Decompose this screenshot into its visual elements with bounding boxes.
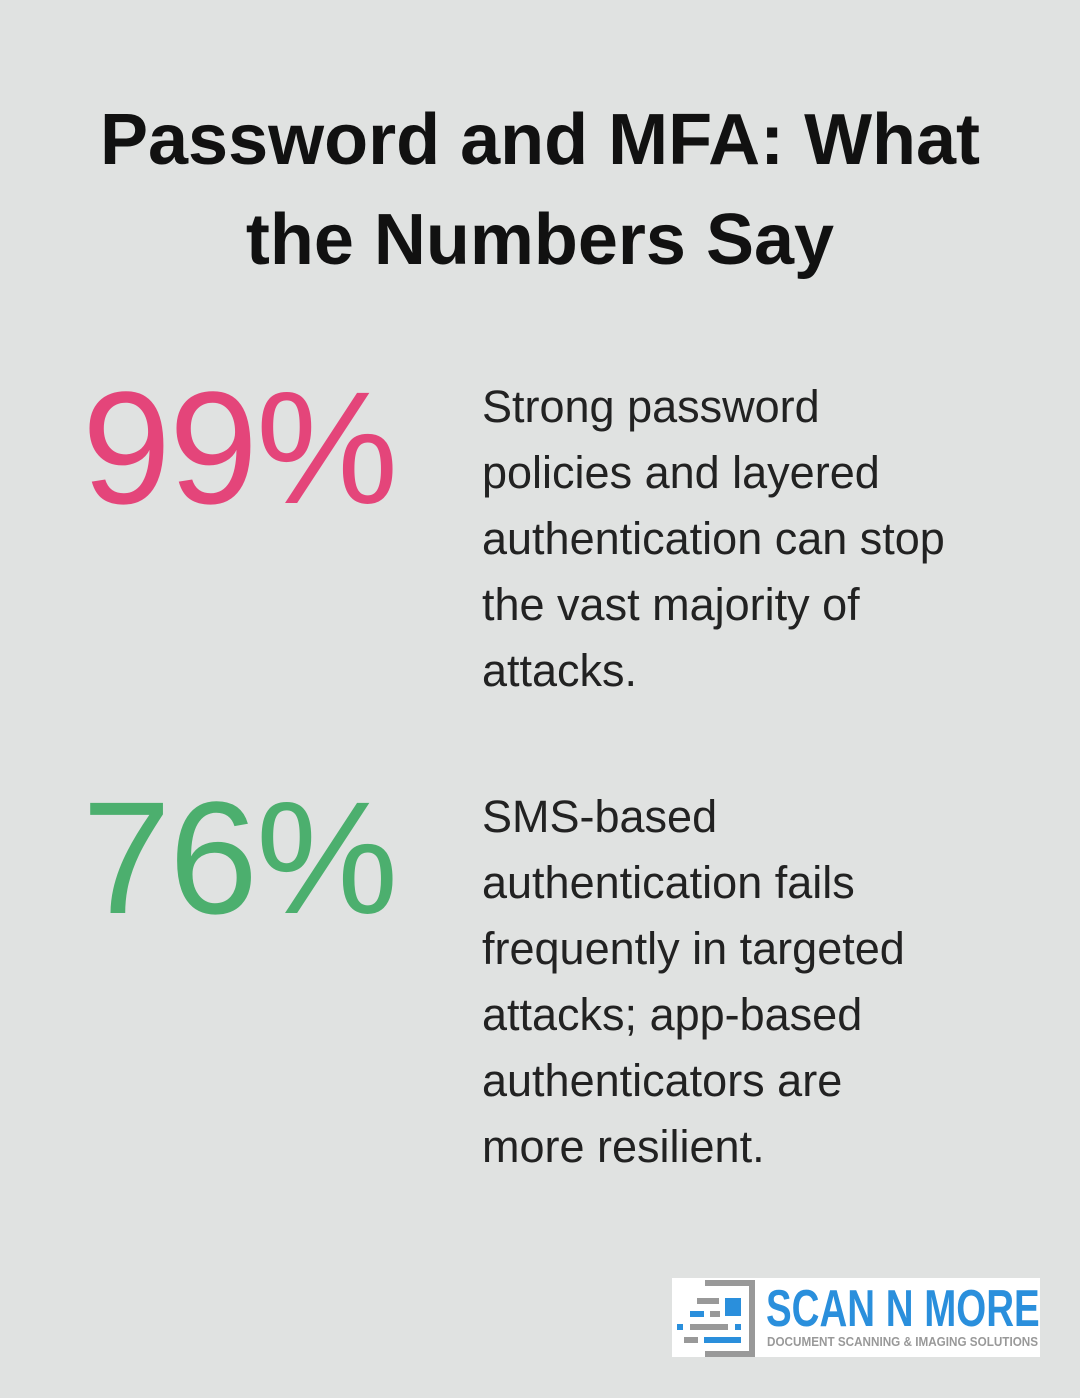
logo: DOCUMENT SCANNING & IMAGING SOLUTIONS [767,1334,1038,1349]
stat: 76%: 76% [82,768,396,947]
icon: scan lines [677,1280,755,1357]
text: 76% description: SMS-based [482,791,717,842]
text: 76% description: frequently in targeted [482,923,905,974]
text: 76% description: more resilient. [482,1121,765,1172]
title [100,100,980,280]
logo [672,1278,1040,1357]
title: the Numbers Say [246,200,834,280]
text: 99% description: Strong password [482,381,820,432]
text: 99% description [482,381,945,696]
text: 99% description: policies and layered [482,447,880,498]
text: 76% description [482,791,905,1172]
stat: 99%: 99% [82,358,396,537]
logo text: SCAN N MORE [766,1280,1040,1338]
text: 99% description: attacks. [482,645,637,696]
title: Password and MFA: What [100,100,980,180]
text: 76% description: attacks; app-based [482,989,862,1040]
text: 76% description: authentication fails [482,857,855,908]
text: 99% description: authentication can stop [482,513,945,564]
text: 99% description: the vast majority of [482,579,860,630]
text: 76% description: authenticators are [482,1055,842,1106]
